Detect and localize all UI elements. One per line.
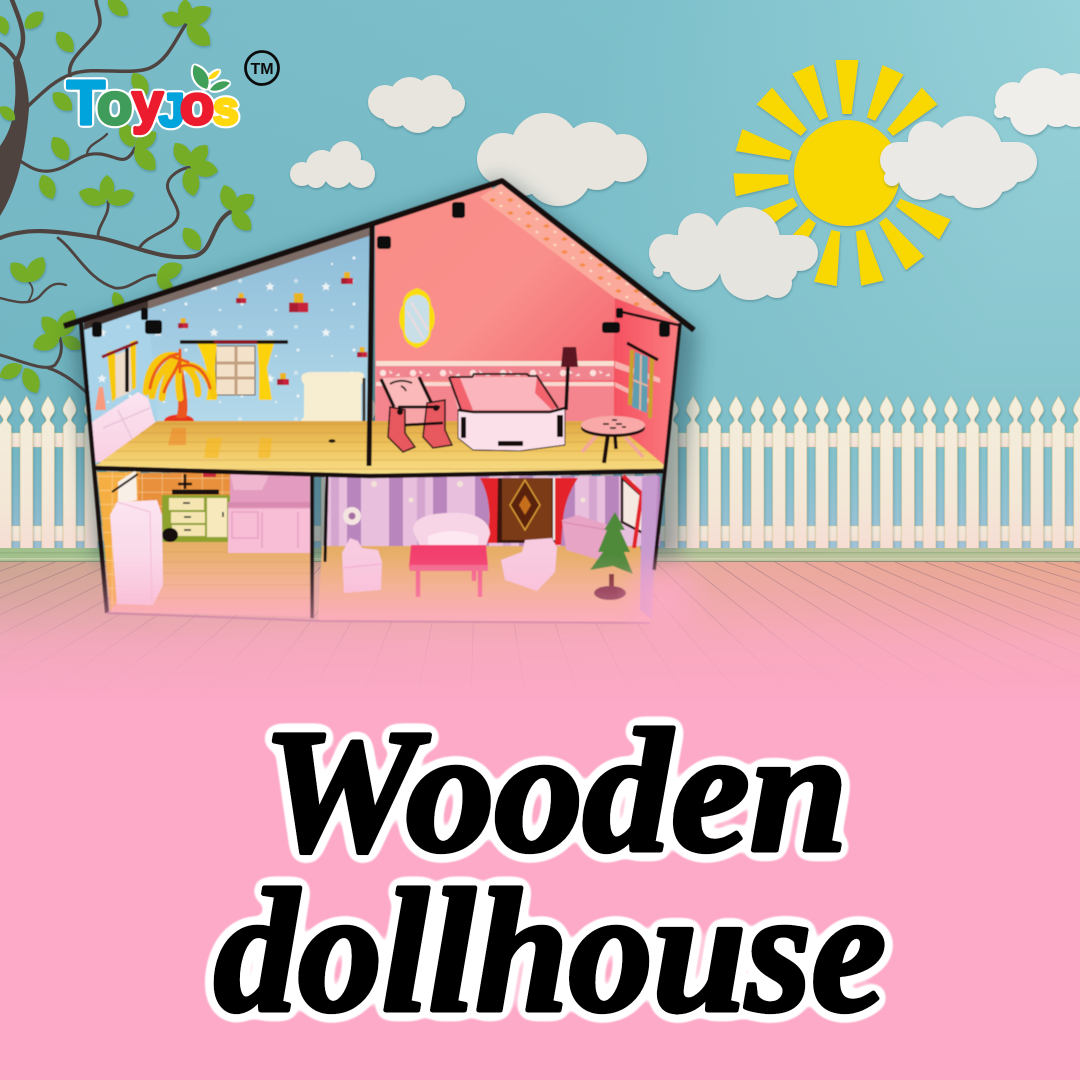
trademark badge [246,52,278,84]
skirting board [0,548,1080,562]
wall ring [343,507,361,525]
wooden floor [0,562,1080,702]
trademark badge: TM [250,61,274,78]
left armchair [342,538,382,593]
title line one: Wooden [262,694,848,889]
cloud: small left [290,141,375,188]
cloud: top right corner [994,68,1080,135]
pink sofa [413,513,490,546]
sun with rays [733,60,951,286]
upper left room: blue nursery [84,224,372,465]
house shadow [70,178,698,560]
house frame [64,181,694,623]
pink bottom band [0,700,1080,1080]
roof brackets [92,202,670,337]
logo: Toyjos [67,65,239,138]
rocking chair [381,377,452,452]
logo wordmark: o [180,73,214,136]
wall background [0,0,1080,552]
white side cabinet [92,392,158,463]
lower right room: living room [318,475,660,622]
wall toy blocks [178,272,367,385]
round side table [581,416,645,463]
logo leaves [193,65,230,91]
window with yellow curtains [180,340,288,400]
small pink lamp [95,387,106,410]
pink fade over lower scene [0,545,1080,705]
right wall panel [640,475,658,620]
upper right room: pink bedroom [375,183,680,468]
logo wordmark: y [132,71,163,134]
tree with branches and leaves [0,0,259,397]
pink cabinets [228,473,310,553]
pink tub [562,515,608,562]
cloud: over sun [880,116,1037,208]
title: Wooden dollhouse [214,694,886,1049]
white fridge [110,500,163,605]
wallpaper border [376,361,660,422]
trunk [0,58,29,216]
sink [172,472,219,492]
pink table [409,545,488,597]
cloud: lower right of roof [649,207,818,300]
toy tree [590,512,633,600]
logo wordmark: o [97,72,132,137]
upper floor [95,421,664,475]
palm plant [146,350,214,428]
black stool blob [162,528,178,542]
crib [449,374,565,451]
door and red curtains [480,478,578,545]
side window [627,343,658,418]
logo wordmark: J [159,84,185,136]
cream dresser [301,372,364,425]
cloud: large behind roof [477,113,647,206]
logo wordmark: s [213,82,239,134]
picket fence [0,390,1080,550]
cloud: small top [368,75,465,133]
right armchair [501,538,557,591]
title line two: dollhouse [214,854,886,1049]
floor lamp [561,347,578,410]
logo wordmark: T [67,69,105,138]
side window and curtain [622,476,645,548]
kitchen drawers [162,495,230,542]
wall mirror [399,288,435,348]
side window [102,340,138,402]
leaves [0,0,259,397]
wooden dollhouse [64,181,694,623]
lower left room: kitchen [97,470,312,617]
